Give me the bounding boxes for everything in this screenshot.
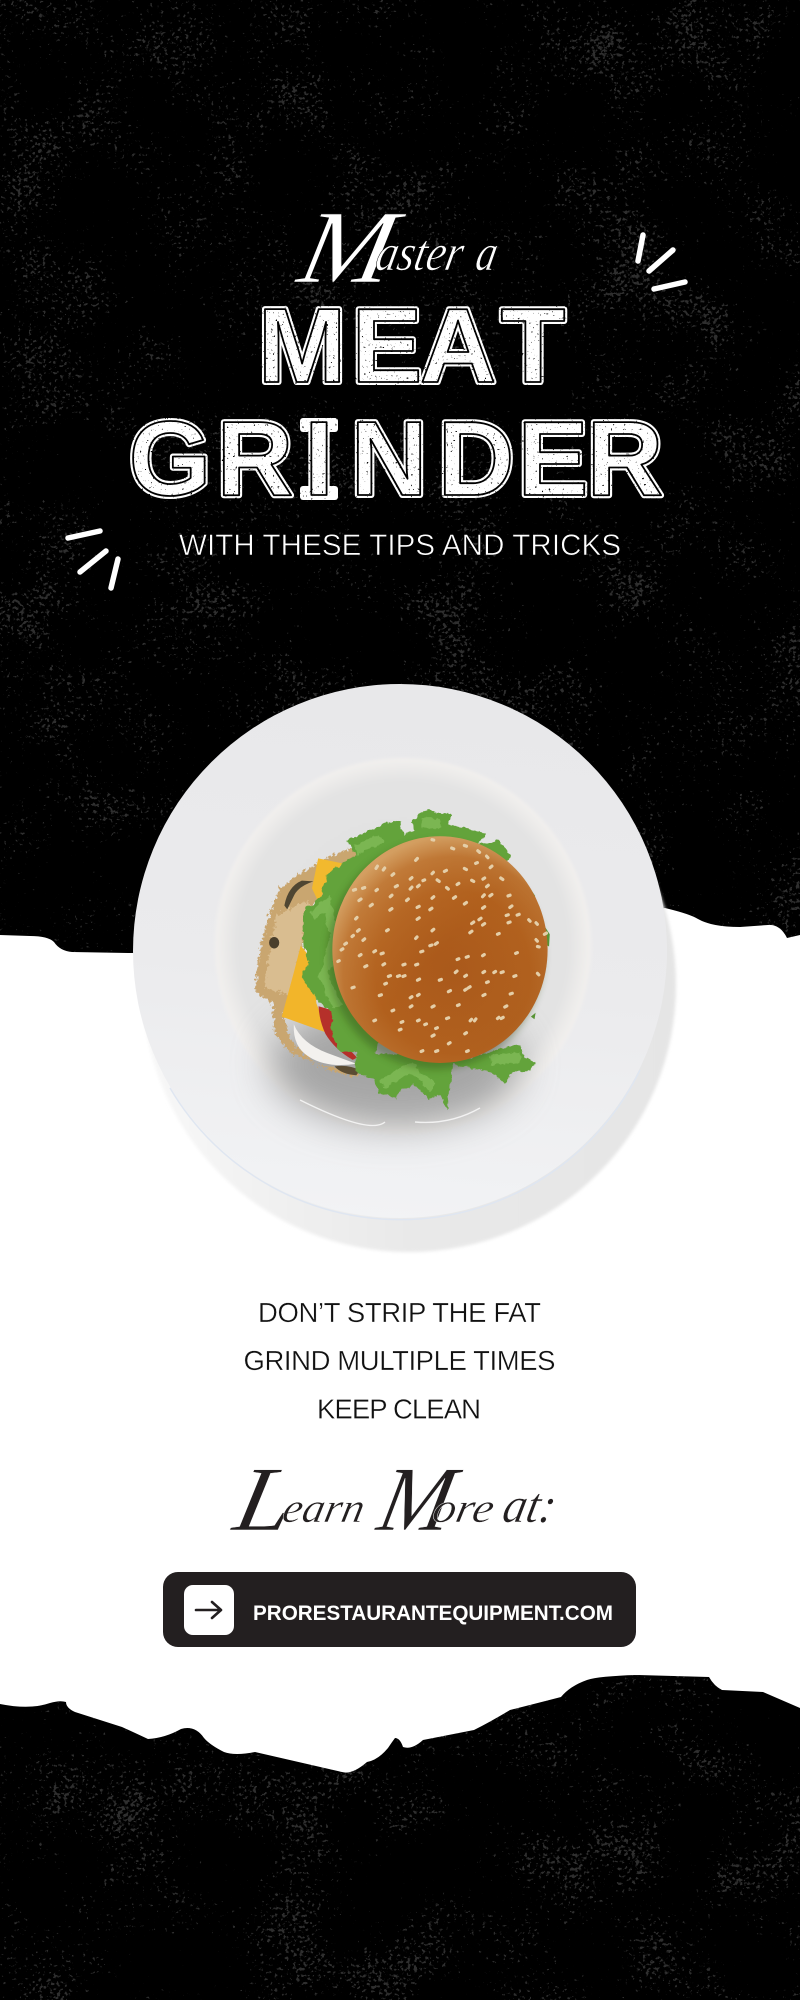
title: Master a: a (461, 225, 503, 282)
tip: keep clean: KEEP CLEAN (317, 1394, 481, 1424)
subtitle: WITH THESE TIPS AND TRICKS (179, 529, 621, 562)
plate with burger (133, 684, 676, 1252)
lettuce right edge (530, 888, 550, 1019)
lettuce (302, 810, 535, 1110)
heading: Learn More at: at: (498, 1477, 562, 1533)
plate (133, 684, 667, 1218)
heading: Learn More at: ore (429, 1485, 510, 1532)
heading: Learn More at: M (369, 1449, 468, 1551)
chicken core (264, 900, 309, 996)
icon: sparkle bottom left (68, 531, 118, 588)
onion (294, 1024, 356, 1065)
tip: grind multiple times: GRIND MULTIPLE TIMES (244, 1345, 556, 1376)
title: Master a: aster (371, 225, 470, 282)
tomato (319, 1006, 357, 1060)
title: Master a (288, 189, 511, 305)
heading: Learn More at: earn (279, 1485, 380, 1532)
title: MEAT GRINDER inline lettering: GRINDER (129, 400, 663, 518)
crispy chicken (255, 847, 362, 1077)
pickles (284, 881, 313, 909)
tip: don't strip the fat: DON’T STRIP THE FAT (258, 1297, 541, 1328)
tip list (244, 1297, 556, 1424)
sesame seeds (338, 840, 547, 1051)
heading: Learn More at: L (224, 1449, 304, 1551)
plate lower edge tint (170, 1070, 640, 1220)
lettuce highlights (313, 823, 520, 1087)
button: website link (163, 1572, 636, 1647)
panel: white torn paper band (0, 908, 800, 1773)
heading: Learn More at (224, 1449, 568, 1551)
cheese (312, 858, 343, 904)
title: MEAT GRINDER inline lettering: GRINDER (129, 400, 663, 518)
website text: PRORESTAURANTEQUIPMENT.COM (253, 1601, 613, 1625)
bun cast shadow (327, 841, 544, 1069)
title: MEAT GRINDER inline lettering (129, 287, 663, 518)
bun light (332, 836, 548, 1063)
plate well (215, 758, 591, 1134)
title: MEAT GRINDER inline lettering: MEAT (258, 287, 565, 405)
title: Master a: M (288, 189, 413, 305)
bun (332, 836, 548, 1063)
icon: arrow tile (184, 1585, 234, 1635)
icon: sparkle top right (638, 235, 685, 289)
well reflection arcs (300, 1100, 480, 1126)
burger (255, 810, 550, 1110)
title: MEAT GRINDER inline lettering: MEAT (258, 287, 565, 405)
plate shadow (142, 718, 676, 1252)
burger shadow (270, 1003, 520, 1127)
